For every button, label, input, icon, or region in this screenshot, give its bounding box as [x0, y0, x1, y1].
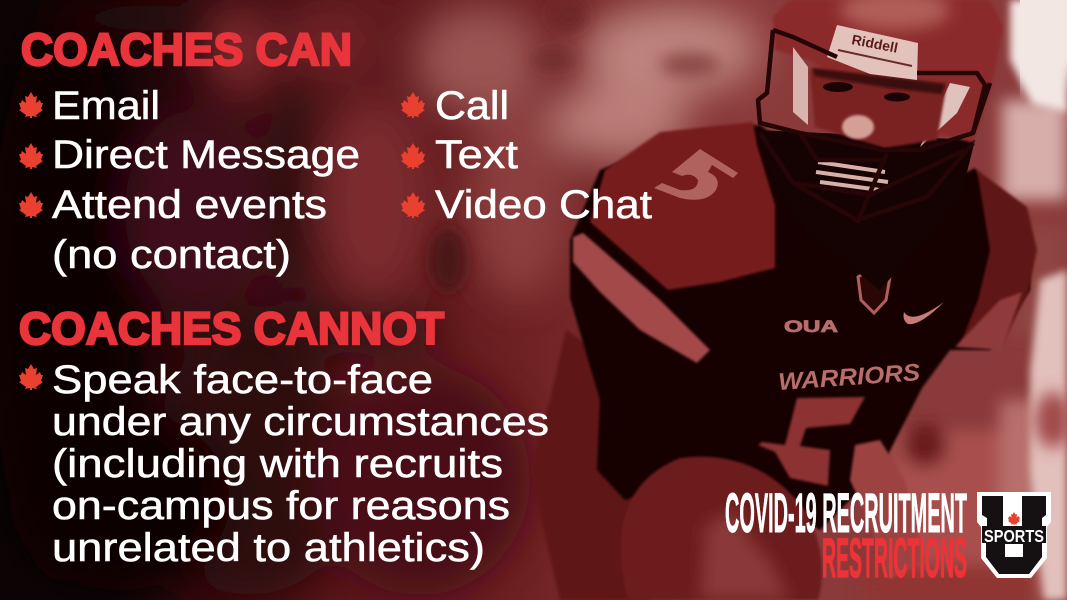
player: forearm pad	[850, 440, 925, 580]
list item: speak face-to-face: under any circumstances	[52, 400, 549, 444]
player: nose	[842, 115, 874, 139]
player: Warriors wordmark: WARRIORS	[777, 359, 921, 396]
player: helmet highlight	[840, 0, 950, 30]
list item: speak face-to-face	[19, 358, 549, 570]
list item: attend events: Attend events	[52, 183, 327, 227]
player: jersey body	[570, 125, 1030, 530]
list item: speak face-to-face: unrelated to athletics)	[52, 526, 485, 570]
player: chin guard stripes	[816, 162, 888, 190]
list item: email: Email	[52, 84, 160, 128]
panel: coaches can	[19, 24, 652, 277]
icon: maple leaf	[1008, 512, 1020, 526]
player: shoulder number 5	[654, 149, 738, 200]
title: covid-19 recruitment restrictions	[725, 481, 967, 589]
player: Nike swoosh	[904, 302, 944, 324]
logo wordmark: sports: SPORTS	[984, 526, 1044, 546]
background: red patch on right figure	[1035, 392, 1067, 448]
player: helmet shell	[773, 0, 1003, 143]
player: right eye	[884, 92, 910, 102]
player: face mask	[758, 30, 990, 223]
player: left sleeve stripe	[573, 233, 710, 363]
player illustration	[530, 0, 1037, 600]
player: Riddell label: Riddell	[850, 31, 899, 56]
list item: direct message: Direct Message	[52, 133, 360, 177]
player: OUA patch: OUA	[784, 317, 838, 336]
heading: coaches cannot: COACHES CANNOT	[19, 303, 444, 354]
heading: coaches can: COACHES CAN	[21, 24, 352, 75]
list item: video chat: Video Chat	[435, 183, 652, 227]
list item: speak face-to-face: (including with recruits	[52, 442, 503, 486]
player: right shoulder	[960, 170, 1037, 345]
list item: speak face-to-face: on-campus for reasons	[52, 484, 510, 528]
list item: text	[401, 133, 518, 177]
player: helmet right padding	[920, 83, 970, 147]
player: right sleeve stripe	[955, 292, 1022, 350]
background: pale figure on right edge	[1030, 270, 1067, 600]
list item: text: Text	[435, 133, 518, 177]
player: left eye	[823, 82, 853, 92]
player: left arm	[530, 330, 650, 600]
list item: speak face-to-face: Speak face-to-face	[52, 358, 433, 402]
player: brow shadow	[812, 68, 945, 94]
panel: coaches cannot	[19, 303, 549, 570]
player: helmet bumper	[827, 25, 918, 80]
list item: attend events	[19, 183, 327, 277]
player: left shoulder	[590, 122, 775, 290]
background: bright right edge core	[1020, 0, 1067, 100]
player: chest crest	[858, 266, 890, 313]
player: face	[810, 70, 947, 148]
logo: U Sports	[977, 492, 1051, 578]
list item: call: Call	[435, 84, 509, 128]
player: football	[621, 457, 822, 600]
player: hand on ball	[700, 510, 790, 600]
background: bright right edge	[1010, 0, 1067, 112]
player: neck shadow	[757, 130, 975, 290]
player: helmet left padding	[793, 47, 808, 125]
list item: attend events: (no contact)	[52, 233, 291, 277]
list item: call	[401, 84, 509, 128]
player: chest number 5	[758, 397, 865, 486]
player: bumper shadow line	[838, 50, 912, 66]
